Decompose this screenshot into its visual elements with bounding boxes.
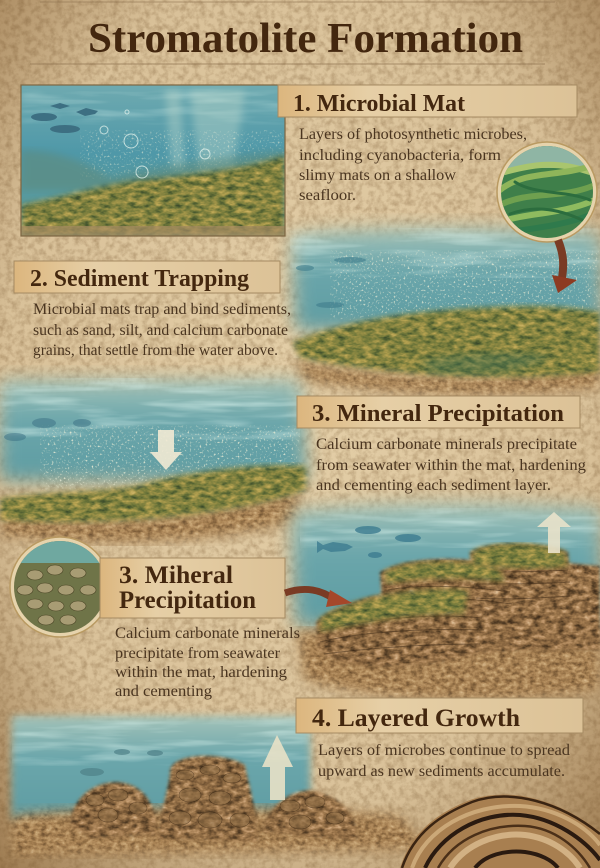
text: microbial mat: seafloor. (299, 187, 356, 204)
text: sediment trapping: such as sand, silt, and calcium carbonate (33, 322, 288, 339)
text: miheral precipitation: Calcium carbonate minerals (115, 625, 300, 642)
icon: sediment grains circle (10, 537, 110, 637)
text: microbial mat: including cyanobacteria, form (299, 147, 501, 164)
icon: microbe strands circle (497, 142, 597, 242)
text: miheral precipitation (115, 625, 300, 700)
header: 3. Mineral Precipitation: 3. Mineral Precipitation (312, 401, 564, 427)
header: 1. Microbial Mat: 1. Microbial Mat (293, 91, 465, 117)
arrow: white up, terraces (537, 512, 571, 553)
text: layered growth: upward as new sediments accumulate. (318, 763, 565, 780)
scene: layered growth (12, 716, 430, 856)
text: miheral precipitation: within the mat, hardening (115, 664, 287, 681)
panel frame: microbial mat (21, 85, 285, 236)
arrow: white down (150, 430, 182, 470)
arrow: red right (285, 589, 352, 607)
header: 3. Miheral Precipitation (100, 558, 285, 618)
text: microbial mat: slimy mats on a shallow (299, 167, 457, 184)
header: 2. Sediment Trapping (14, 261, 280, 293)
arrow: white up, growth (262, 735, 293, 800)
text: sediment trapping (33, 301, 291, 359)
text: miheral precipitation: and cementing (115, 683, 212, 700)
arrow: red down (552, 240, 577, 293)
text: microbial mat (299, 126, 527, 204)
text: mineral precipitation: and cementing each sediment layer. (316, 477, 551, 494)
header: 2. Sediment Trapping: 2. Sediment Trapping (30, 266, 249, 292)
text: mineral precipitation: Calcium carbonate minerals precipitate (316, 436, 577, 453)
panel: microbial mat image (21, 85, 285, 236)
header: 4. Layered Growth (296, 698, 583, 733)
icon: fossil stromatolite cross-section (400, 795, 600, 868)
text: layered growth (318, 742, 570, 780)
title: Stromatolite Formation (88, 16, 523, 62)
text: sediment trapping: grains, that settle from the water above. (33, 342, 278, 359)
scene: sediment trapping seabed (290, 228, 600, 395)
scene: stromatolite terraces (292, 504, 600, 701)
header: 4. Layered Growth: 4. Layered Growth (312, 705, 520, 732)
text: microbial mat: Layers of photosynthetic microbes, (299, 126, 527, 143)
header: 1. Microbial Mat (278, 85, 577, 117)
text: layered growth: Layers of microbes continue to spread (318, 742, 570, 759)
header: 3. Miheral Precipitation: 3. Miheral (119, 562, 233, 589)
header: 3. Miheral Precipitation: Precipitation (119, 587, 256, 614)
text: mineral precipitation (316, 436, 586, 494)
text: miheral precipitation: precipitate from seawater (115, 645, 281, 662)
scene: mineral precipitation seabed left (0, 378, 306, 543)
text: sediment trapping: Microbial mats trap and bind sediments, (33, 301, 291, 318)
text: mineral precipitation: from seawater within the mat, hardening (316, 457, 586, 474)
